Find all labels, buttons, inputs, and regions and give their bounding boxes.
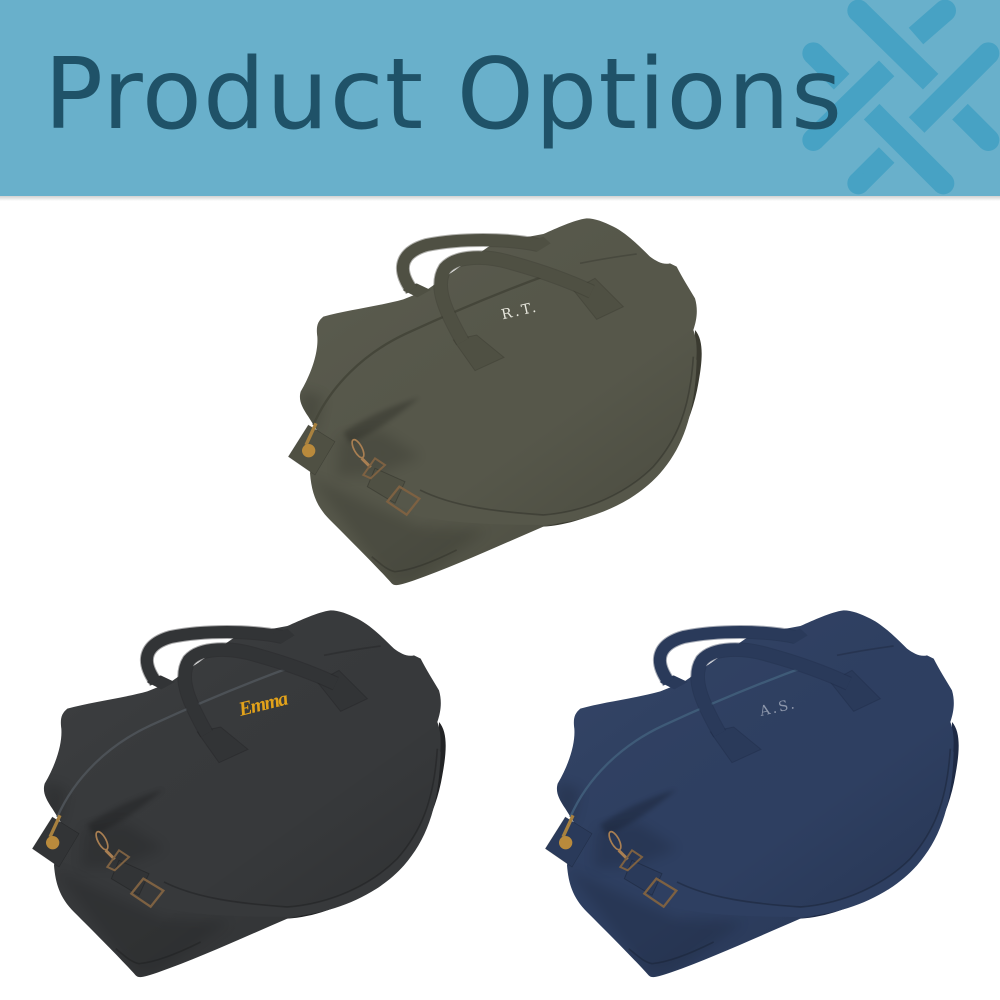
product: navy bag with A.S. monogram xyxy=(545,610,959,977)
zipper xyxy=(57,666,294,817)
banner shadow xyxy=(0,196,1000,201)
shoulder strap and buckle xyxy=(350,357,697,525)
bag body xyxy=(44,610,446,977)
monogram: R.T. xyxy=(500,300,538,323)
title: Product Options xyxy=(44,38,842,152)
carry handles xyxy=(660,629,880,763)
carry handles xyxy=(403,237,623,371)
shoulder strap and buckle xyxy=(94,749,441,917)
zipper tag xyxy=(545,815,592,867)
monogram: A.S. xyxy=(757,696,796,720)
banner background xyxy=(0,0,1000,196)
zipper xyxy=(313,274,550,425)
zipper tag xyxy=(288,423,335,475)
bag body xyxy=(300,218,702,585)
product: charcoal bag with Emma embroidery xyxy=(32,610,446,977)
shoulder strap and buckle xyxy=(607,749,954,917)
bag body xyxy=(557,610,959,977)
zipper xyxy=(570,666,807,817)
name embroidery: Emma xyxy=(236,687,290,721)
carry handles xyxy=(147,629,367,763)
product: olive bag with R.T. monogram xyxy=(288,218,702,585)
zipper tag xyxy=(32,815,79,867)
icon: woven cross logo xyxy=(802,0,999,194)
